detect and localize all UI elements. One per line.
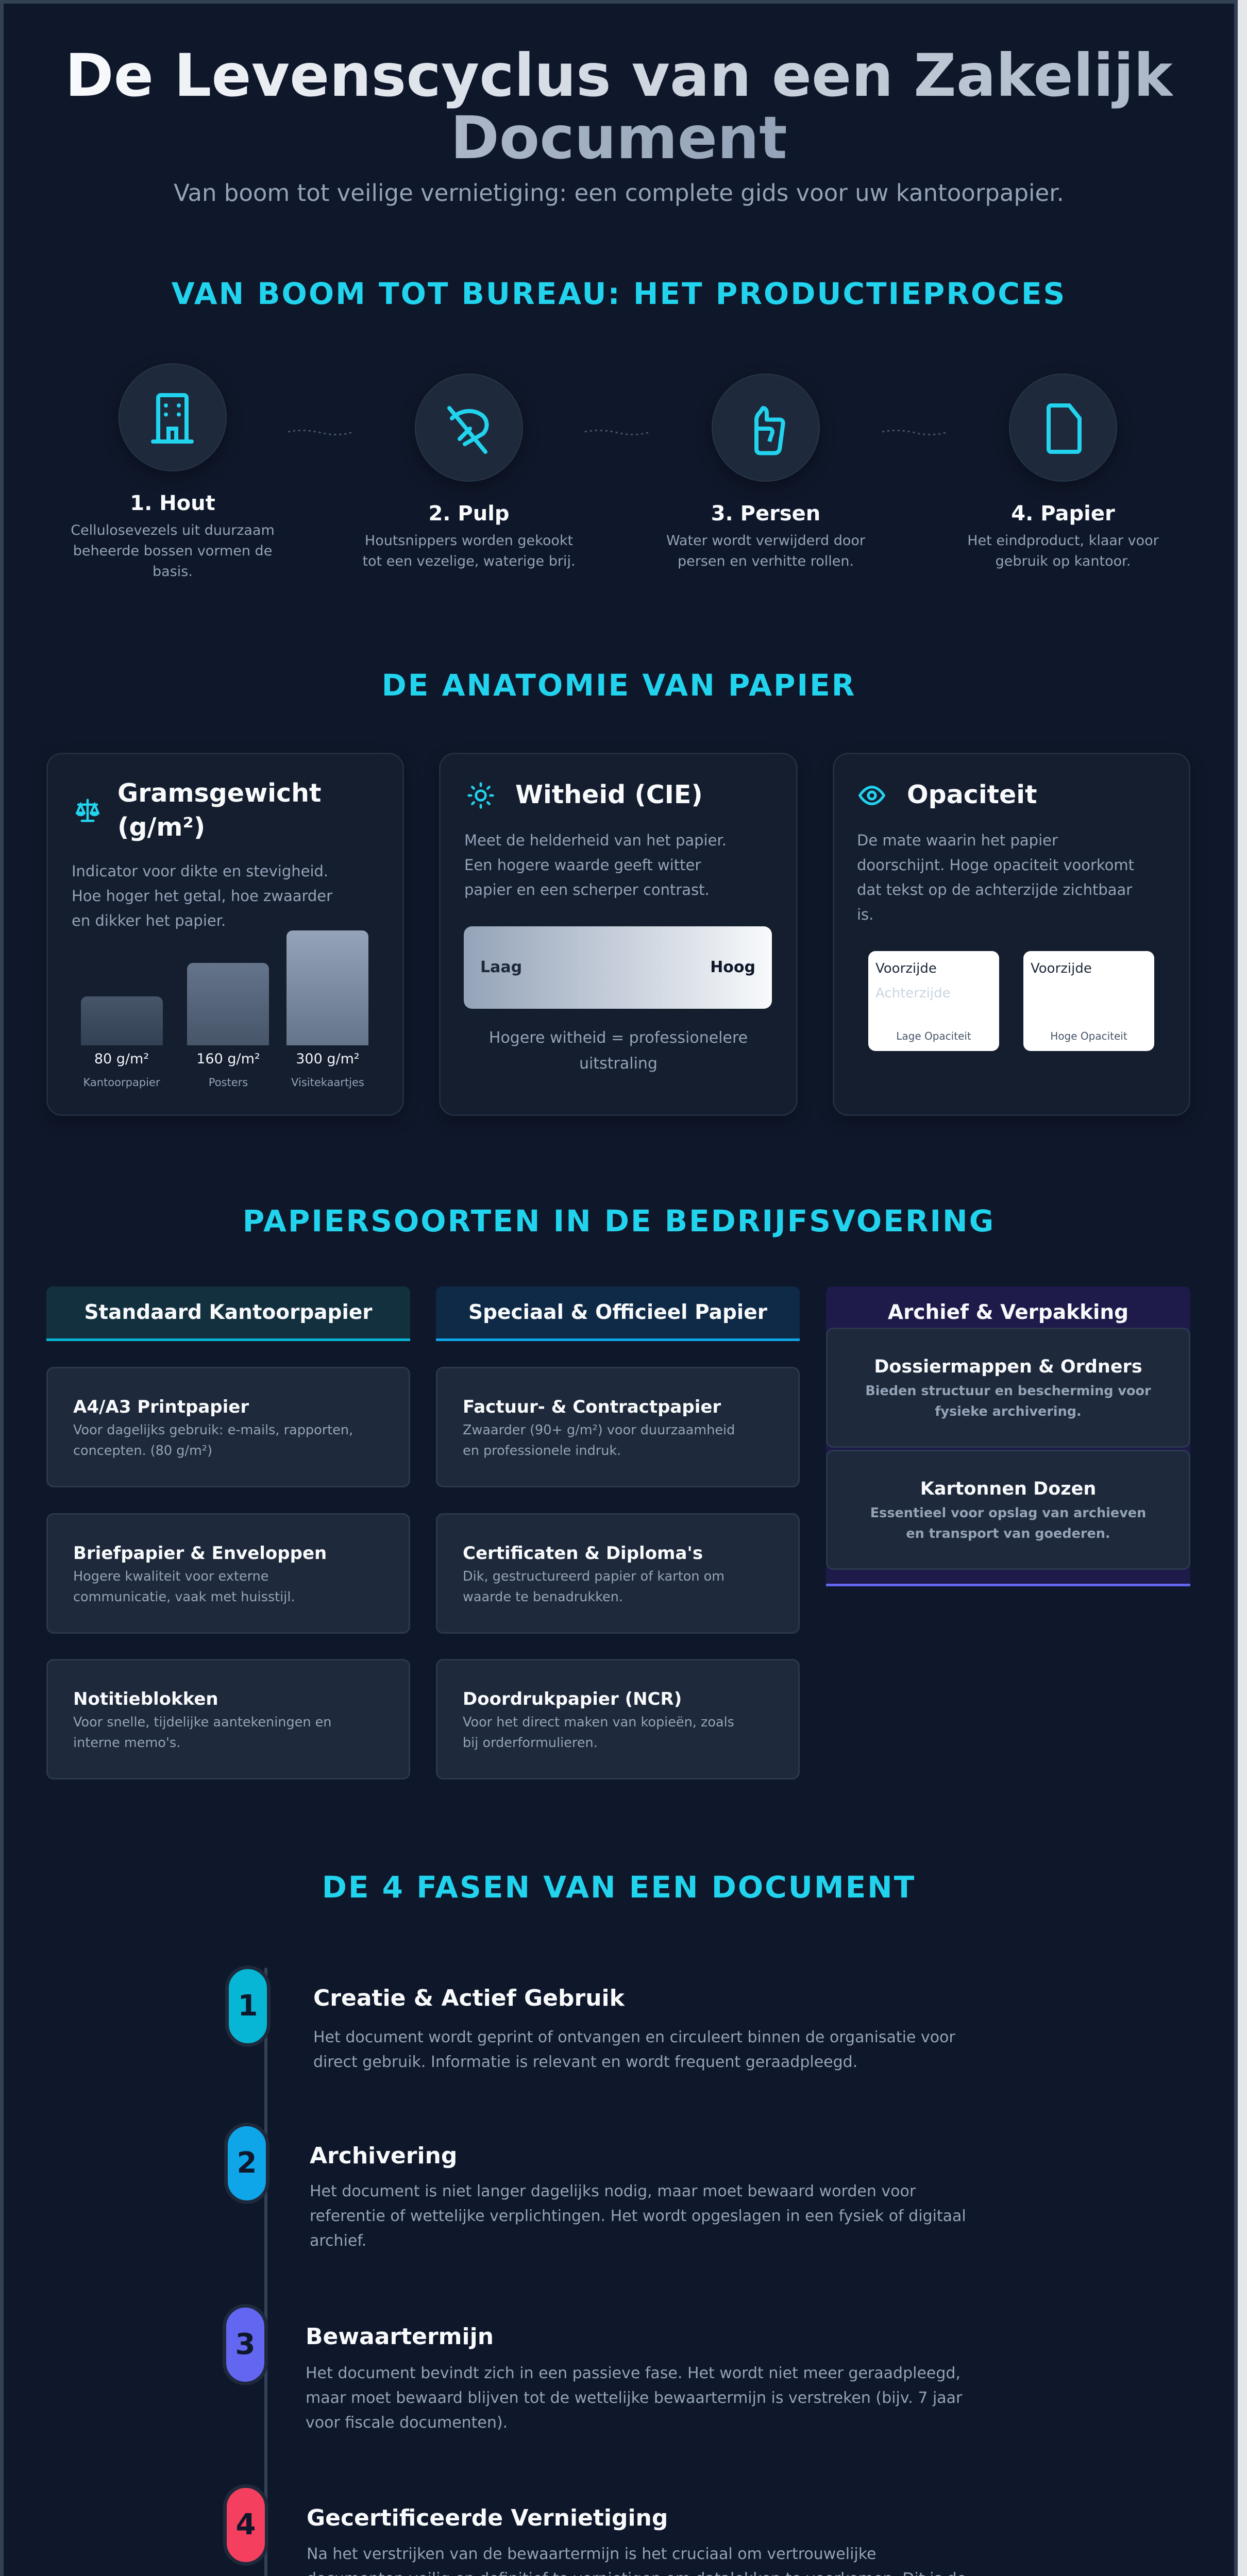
step 3: persen: persen en verhitte rollen.: [678, 553, 854, 569]
panel: gramsgewicht: Gramsgewicht: [117, 778, 321, 808]
panel: opaciteit: Voorzijde: [1031, 961, 1092, 976]
phase 2: referentie of wettelijke verplichtingen. Het wordt opgeslagen in een fysiek of digitaal: [310, 2207, 966, 2225]
step 2: pulp: Houtsnippers worden gekookt: [365, 533, 573, 549]
gradient scale: Laag: [480, 958, 522, 976]
column: archief: fysieke archivering.: [935, 1404, 1082, 1419]
bar chart: 160 g/m²: [196, 1051, 260, 1067]
icon: file: [1009, 374, 1117, 482]
timeline: [223, 1965, 966, 2576]
gradient scale: Hoog: [710, 958, 755, 976]
step 4: papier: Het eindproduct, klaar voor: [967, 533, 1159, 549]
phase 4: 4: [236, 2508, 256, 2541]
panel: opaciteit: [833, 753, 1190, 1116]
phase 2: 2: [237, 2146, 257, 2180]
phase 2: [224, 2123, 966, 2250]
step 1: hout: basis.: [153, 564, 193, 580]
column: standaard: Notitieblokken: [73, 1689, 218, 1709]
step 4: papier: gebruik op kantoor.: [996, 553, 1131, 569]
step 4: papier: [967, 374, 1159, 569]
phase 3: 3: [235, 2328, 255, 2361]
step 4: papier: 4. Papier: [1011, 502, 1115, 526]
phase 3: [223, 2304, 963, 2432]
step 1: hout: 1. Hout: [130, 492, 215, 515]
column: speciaal: Speciaal & Officieel Papier: [468, 1301, 767, 1324]
paper samples: [868, 951, 999, 1051]
icon: pulp: [415, 374, 523, 482]
column: standaard: [46, 1286, 410, 1780]
column: speciaal: bij orderformulieren.: [463, 1735, 598, 1751]
panel: gramsgewicht: Indicator voor dikte en stevigheid.: [72, 862, 328, 880]
phase 4: Na het verstrijken van de bewaartermijn is het cruciaal om vertrouwelijke: [307, 2545, 877, 2563]
panel: witheid: Een hogere waarde geeft witter: [464, 856, 701, 874]
step 1: hout: beheerde bossen vormen de: [73, 543, 272, 559]
panel: witheid: uitstraling: [579, 1055, 658, 1073]
phase 4: Gecertificeerde Vernietiging: [307, 2505, 668, 2531]
step 3: persen: Water wordt verwijderd door: [666, 533, 865, 549]
step 2: pulp: [362, 374, 576, 569]
column: archief: Kartonnen Dozen: [920, 1479, 1096, 1499]
step 1: hout: [71, 363, 275, 580]
phase 3: maar moet bewaard blijven tot de wettelijke bewaartermijn is verstreken (bijv. 7 jaar: [306, 2389, 962, 2407]
phase 3: Het document bevindt zich in een passieve fase. Het wordt niet meer geraadpleegd,: [306, 2364, 960, 2382]
bar chart: Posters: [209, 1076, 248, 1089]
paper samples: Achterzijde: [875, 986, 951, 1001]
bar chart: 80 g/m²: [94, 1051, 149, 1067]
phase 2: Archivering: [310, 2143, 457, 2169]
phase 1: Het document wordt geprint of ontvangen en circuleert binnen de organisatie voor: [313, 2028, 955, 2046]
column: standaard: Hogere kwaliteit voor externe: [73, 1569, 268, 1584]
paper samples: Lage Opaciteit: [896, 1030, 971, 1042]
heading: fasen: DE 4 FASEN VAN EEN DOCUMENT: [322, 1870, 916, 1905]
bar chart: Visitekaartjes: [291, 1076, 364, 1089]
column: speciaal: waarde te benadrukken.: [463, 1589, 623, 1605]
column: standaard: Standaard Kantoorpapier: [84, 1301, 373, 1324]
icon: scale: [75, 799, 100, 822]
column: archief: [826, 1286, 1190, 1586]
column: standaard: interne memo's.: [73, 1735, 180, 1751]
column: speciaal: Voor het direct maken van kopieën, zoals: [463, 1715, 734, 1730]
icon: building: [119, 363, 227, 471]
panel: opaciteit: is.: [857, 906, 873, 923]
icon: eye: [858, 786, 885, 805]
column: standaard: Briefpapier & Enveloppen: [73, 1543, 327, 1564]
panel: gramsgewicht: Hoe hoger het getal, hoe zwaarder: [72, 887, 332, 905]
column: archief: en transport van goederen.: [906, 1526, 1110, 1541]
panel: gramsgewicht: [46, 753, 404, 1116]
heading: productieproces: VAN BOOM TOT BUREAU: HET PRODUCTIEPROCES: [172, 276, 1066, 311]
connector dashes: [288, 430, 946, 435]
column: standaard: A4/A3 Printpapier: [73, 1397, 249, 1417]
bar chart: 300 g/m²: [296, 1051, 360, 1067]
paper samples: Voorzijde: [875, 961, 937, 976]
column: speciaal: Zwaarder (90+ g/m²) voor duurzaamheid: [463, 1422, 735, 1438]
column: speciaal: [436, 1286, 800, 1780]
phase 1: direct gebruik. Informatie is relevant en wordt frequent geraadpleegd.: [313, 2053, 857, 2071]
column: standaard: Voor snelle, tijdelijke aantekeningen en: [73, 1715, 331, 1730]
subtitle: Van boom tot veilige vernietiging: een complete gids voor uw kantoorpapier.: [174, 179, 1064, 207]
panel: gramsgewicht: (g/m²): [117, 812, 205, 842]
heading: anatomie: DE ANATOMIE VAN PAPIER: [382, 668, 856, 703]
column: standaard: Voor dagelijks gebruik: e-mails, rapporten,: [73, 1422, 353, 1438]
column: archief: Bieden structuur en bescherming voor: [865, 1383, 1151, 1399]
phase 3: voor fiscale documenten).: [306, 2414, 508, 2432]
gradient scale: [464, 926, 772, 1009]
step 3: persen: 3. Persen: [711, 502, 820, 526]
title: [65, 41, 1173, 172]
panel: gramsgewicht: en dikker het papier.: [72, 912, 226, 929]
phase 1: Creatie & Actief Gebruik: [313, 1985, 625, 2011]
icon: sun: [467, 782, 494, 809]
column: speciaal: en professionele indruk.: [463, 1443, 621, 1459]
heading: papiersoorten: PAPIERSOORTEN IN DE BEDRIJFSVOERING: [243, 1204, 995, 1239]
column: speciaal: Factuur- & Contractpapier: [463, 1397, 721, 1417]
icon: hand: [712, 374, 820, 482]
panel: opaciteit: De mate waarin het papier: [857, 832, 1058, 849]
bar chart: [81, 930, 368, 1089]
panel: witheid: [439, 753, 798, 1116]
panel: opaciteit: Opaciteit: [907, 780, 1037, 809]
column: archief: Dossiermappen & Ordners: [874, 1357, 1142, 1377]
step 2: pulp: 2. Pulp: [428, 502, 510, 526]
column: standaard: concepten. (80 g/m²): [73, 1443, 212, 1459]
step 3: persen: [666, 374, 865, 569]
phase 1: 1: [238, 1989, 258, 2023]
column: archief: Essentieel voor opslag van archieven: [870, 1505, 1146, 1521]
column: speciaal: Dik, gestructureerd papier of karton om: [463, 1569, 724, 1584]
column: archief: Archief & Verpakking: [888, 1301, 1128, 1324]
phase 2: archief.: [310, 2232, 366, 2250]
title: De Levenscyclus van een Zakelijk: [65, 41, 1173, 110]
panel: opaciteit: doorschijnt. Hoge opaciteit voorkomt: [857, 856, 1134, 874]
step 1: hout: Cellulosevezels uit duurzaam: [71, 522, 275, 538]
panel: opaciteit: Hoge Opaciteit: [1050, 1030, 1127, 1042]
step 2: pulp: tot een vezelige, waterige brij.: [362, 553, 576, 569]
phase 4: [223, 2484, 966, 2576]
phase 3: Bewaartermijn: [306, 2324, 494, 2350]
panel: witheid: Hogere witheid = professionelere: [489, 1029, 748, 1047]
phase 1: [225, 1965, 955, 2071]
phase 2: Het document is niet langer dagelijks nodig, maar moet bewaard worden voor: [310, 2182, 916, 2200]
panel: witheid: Meet de helderheid van het papier.: [464, 832, 727, 849]
column: standaard: communicatie, vaak met huisstijl.: [73, 1589, 295, 1605]
panel: witheid: Witheid (CIE): [515, 780, 703, 809]
panel: opaciteit: dat tekst op de achterzijde zichtbaar: [857, 881, 1132, 899]
panel: witheid: papier en een scherper contrast.: [464, 881, 710, 899]
title: Document: [450, 104, 787, 172]
column: speciaal: Certificaten & Diploma's: [463, 1543, 703, 1564]
column: speciaal: Doordrukpapier (NCR): [463, 1689, 682, 1709]
bar chart: Kantoorpapier: [83, 1076, 160, 1089]
